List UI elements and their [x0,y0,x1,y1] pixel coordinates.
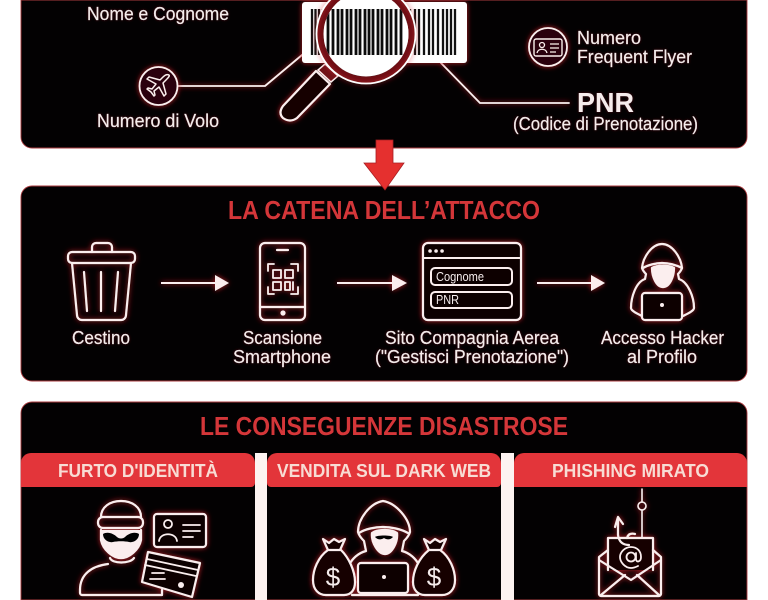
icon: barcode ticket [302,2,467,63]
label: Sito Compagnia Aerea: Sito Compagnia Aerea [385,327,560,348]
column header: targeted phishing [514,453,747,487]
icon: airline website form [423,243,521,320]
label: Scansione Smartphone: Scansione [243,327,322,348]
icon: hooded hacker with laptop [631,244,694,320]
icon: hacker with money bags: $ [427,562,442,592]
icon: airline website form: PNR [436,292,459,307]
connector: PNR [441,63,569,103]
label: Accesso Hacker al Profilo: Accesso Hacker [601,327,724,348]
arrow: step 1 [161,275,229,291]
icon: hacker with money bags [313,501,455,595]
column: dark web sale [267,453,501,595]
heading: FURTO D'IDENTITÀ: FURTO D'IDENTITÀ [58,460,218,481]
panel: consequences [21,402,747,600]
arrow: step 3 [537,275,605,291]
connector: frequent flyer [467,46,529,48]
column gap [501,453,514,600]
label: Sito Compagnia Aerea [375,327,569,367]
icon: trash bin [68,243,135,320]
column: targeted phishing [514,453,747,596]
icon: airline website form: Cognome [436,269,484,284]
arrow: step 2 [337,275,407,291]
label: Nome e Cognome: Nome e Cognome [87,3,229,24]
heading: attack chain: LA CATENA DELL’ATTACCO [228,195,540,225]
heading: consequences: LE CONSEGUENZE DISASTROSE [200,411,568,441]
icon: magnifying glass [280,0,416,120]
label: Numero Frequent Flyer: Numero [577,27,641,48]
heading: PHISHING MIRATO: PHISHING MIRATO [552,460,709,481]
column gap [255,453,267,600]
icon: hacker with money bags: $ [326,562,341,592]
column: identity theft [21,453,255,597]
panel: attack chain [21,186,747,381]
icon: thief with ID and credit card [80,501,206,597]
label: Accesso Hacker al Profilo [601,327,724,367]
label: PNR: PNR [577,87,634,118]
label: Accesso Hacker al Profilo: al Profilo [627,346,697,367]
label: Scansione Smartphone: Smartphone [233,346,331,367]
label: Numero di Volo: Numero di Volo [97,110,219,131]
label: Numero Frequent Flyer [577,27,692,67]
icon: smartphone with QR code [260,243,305,320]
icon: airplane badge [140,67,178,105]
label: Codice di Prenotazione: (Codice di Prenotazione) [513,113,698,134]
column header: dark web sale [267,453,501,487]
panel: boarding pass data [21,0,747,148]
label: Numero Frequent Flyer: Frequent Flyer [577,46,692,67]
column header: identity theft [21,453,255,487]
label: Cestino: Cestino [72,327,130,348]
label: Sito Compagnia Aerea: ("Gestisci Prenotazione") [375,346,569,367]
connector: flight number [178,55,302,86]
icon: frequent flyer card badge [529,28,567,66]
arrow: down to attack chain [364,140,404,190]
label: Scansione Smartphone [233,327,331,367]
icon: phishing hook and envelope [599,489,661,596]
heading: VENDITA SUL DARK WEB: VENDITA SUL DARK WEB [277,460,491,481]
